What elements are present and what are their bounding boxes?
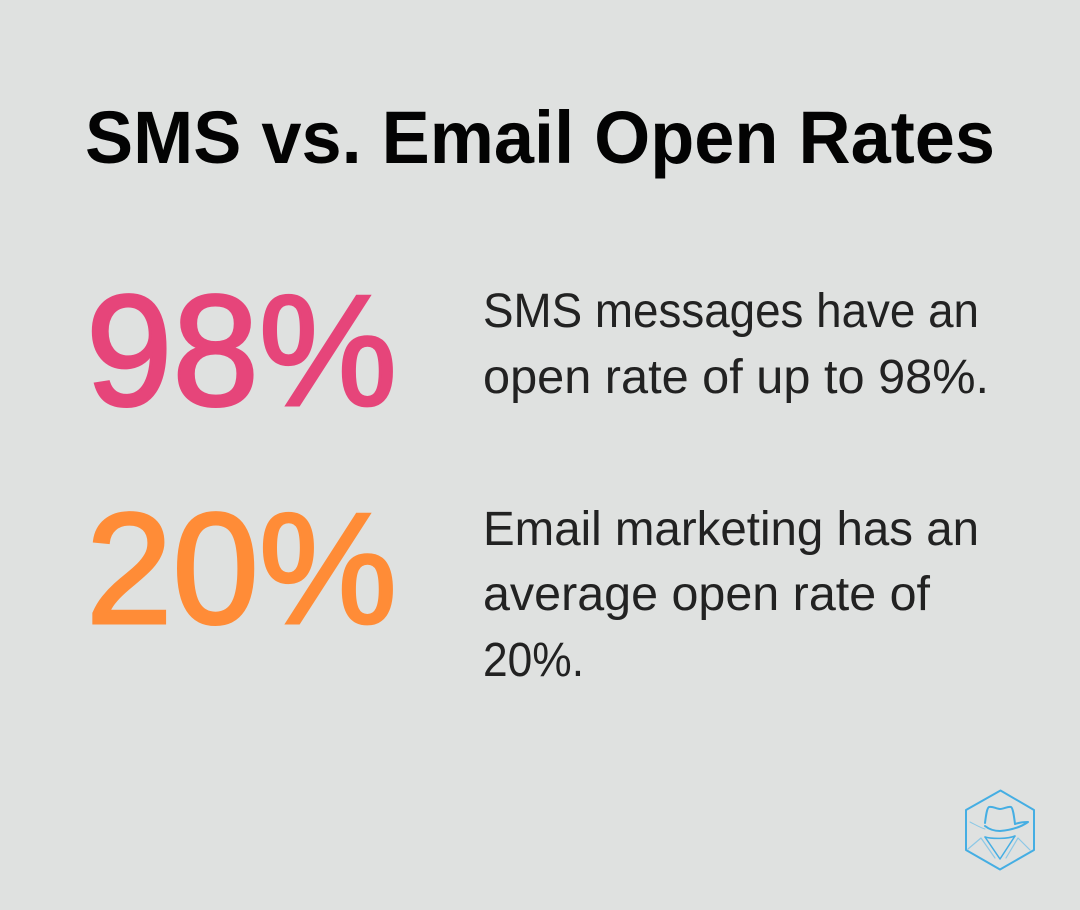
icon: hexagon logo with hat xyxy=(966,790,1034,870)
description: email open rate xyxy=(483,503,979,687)
title: SMS vs. Email Open Rates xyxy=(85,96,995,179)
stat: 20%: 20% xyxy=(86,481,397,657)
description: email open rate: Email marketing has an xyxy=(483,503,979,556)
description: SMS open rate: SMS messages have an xyxy=(483,285,979,338)
description: email open rate: 20%. xyxy=(483,634,584,687)
stat: 98%: 98% xyxy=(86,263,397,439)
description: SMS open rate xyxy=(483,285,989,404)
description: email open rate: average open rate of xyxy=(483,568,931,621)
description: SMS open rate: open rate of up to 98%. xyxy=(483,351,989,404)
